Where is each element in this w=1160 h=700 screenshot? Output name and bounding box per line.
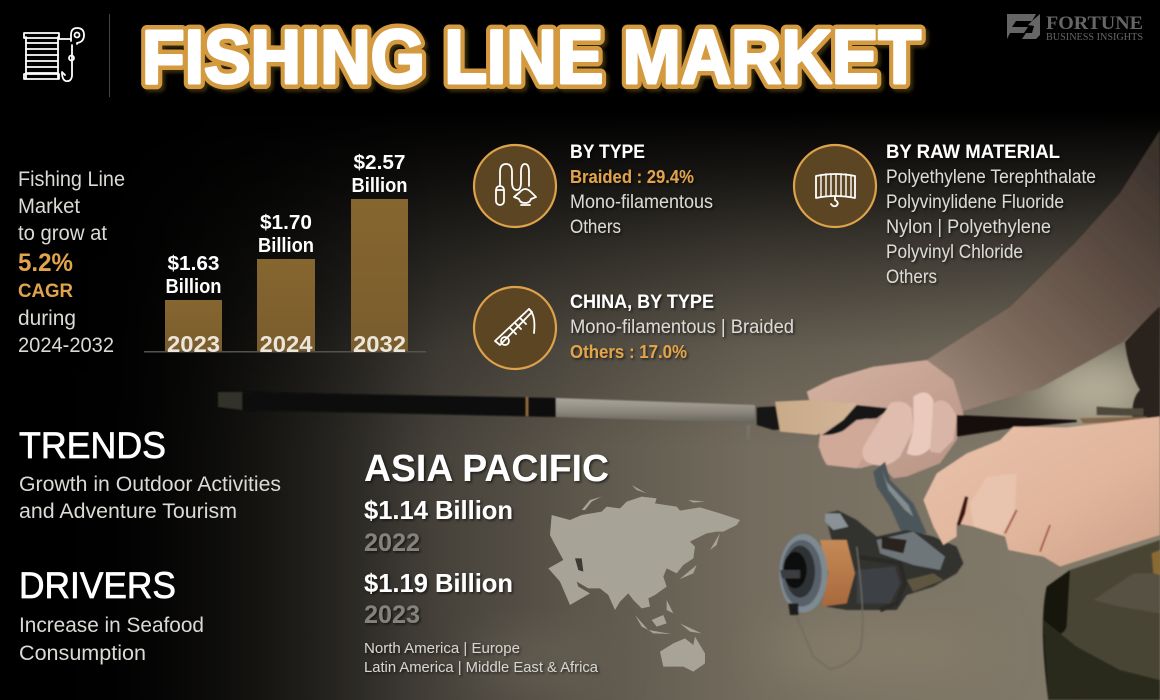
hook bbox=[59, 28, 84, 81]
text block: CAGR summary: Market bbox=[18, 195, 80, 218]
front hand bbox=[923, 417, 1160, 567]
text block: by raw material: Others bbox=[886, 266, 937, 288]
clothing at right edge bbox=[1125, 305, 1160, 425]
text block: Asia Pacific: 2022 bbox=[364, 529, 420, 557]
text block: Asia Pacific: 2023 bbox=[364, 601, 420, 629]
bar chart: 2023 bbox=[167, 331, 220, 357]
text block: China by type bbox=[570, 291, 794, 362]
brand logo: BUSINESS INSIGHTS bbox=[1046, 32, 1143, 43]
text block: by raw material bbox=[886, 141, 1096, 288]
text block: CAGR summary: to grow at bbox=[18, 222, 107, 245]
title: FISHING LINE MARKET bbox=[142, 15, 921, 100]
rod bbox=[218, 392, 242, 410]
text block: Asia Pacific: Latin America | Middle East & Africa bbox=[364, 659, 599, 676]
brand logo bbox=[1007, 13, 1143, 43]
text block: by raw material: BY RAW MATERIAL bbox=[886, 141, 1060, 163]
text block: Asia Pacific: North America | Europe bbox=[364, 640, 520, 657]
brand logo: FORTUNE bbox=[1046, 13, 1143, 34]
reel body bbox=[825, 511, 963, 610]
icon: spool and hook logo bbox=[24, 28, 84, 81]
text block: drivers: Consumption bbox=[19, 642, 146, 665]
bar chart: 2032 bbox=[353, 331, 406, 357]
text block: by raw material: Polyvinyl Chloride bbox=[886, 241, 1023, 263]
text block: drivers bbox=[19, 565, 204, 665]
text block: CAGR summary: CAGR bbox=[18, 281, 73, 302]
text block: by type: Braided : 29.4% bbox=[570, 167, 694, 187]
text block: CAGR summary: Fishing Line bbox=[18, 168, 125, 191]
reel spool bbox=[820, 540, 855, 607]
text block: Asia Pacific bbox=[364, 448, 609, 676]
text block: trends: and Adventure Tourism bbox=[19, 500, 237, 523]
icon: fishing rod bbox=[474, 287, 556, 369]
text block: China by type: CHINA, BY TYPE bbox=[570, 291, 714, 313]
text block: by type bbox=[570, 141, 713, 238]
title: FISHING LINE MARKET bbox=[142, 15, 921, 100]
bar chart: Billion bbox=[166, 275, 222, 298]
map: Asia Pacific bbox=[548, 485, 740, 672]
text block: trends: TRENDS bbox=[19, 425, 166, 466]
bar chart: Billion bbox=[352, 174, 408, 197]
text block: drivers: DRIVERS bbox=[19, 565, 176, 606]
bar chart bbox=[144, 151, 426, 357]
text block: by type: BY TYPE bbox=[570, 141, 645, 163]
back hand bbox=[807, 360, 963, 478]
bail wire bbox=[797, 547, 863, 669]
text block: by raw material: Polyvinylidene Fluoride bbox=[886, 191, 1064, 213]
fingers bbox=[819, 419, 877, 468]
text block: CAGR summary: during bbox=[18, 307, 76, 330]
upper arm bbox=[925, 130, 1160, 412]
text block: by type: Others bbox=[570, 216, 621, 238]
text block: Asia Pacific: ASIA PACIFIC bbox=[364, 448, 609, 490]
rod fitting and cork bbox=[747, 425, 751, 439]
text block: CAGR summary: 5.2% bbox=[18, 249, 73, 277]
text block: drivers: Increase in Seafood bbox=[19, 614, 204, 637]
trousers bbox=[1044, 540, 1160, 700]
text block: by raw material: Nylon | Polyethylene bbox=[886, 216, 1051, 238]
icon: line with lure and fish bbox=[474, 145, 556, 227]
text block: by raw material: Polyethylene Terephthalate bbox=[886, 166, 1096, 188]
bar chart: $2.57 bbox=[354, 151, 406, 174]
text block: CAGR summary bbox=[18, 168, 125, 357]
text block: CAGR summary: 2024-2032 bbox=[18, 334, 114, 357]
text block: Asia Pacific: $1.14 Billion bbox=[364, 495, 513, 525]
bar chart: $1.63 bbox=[168, 252, 220, 275]
text block: trends: Growth in Outdoor Activities bbox=[19, 473, 281, 496]
icon: raw material spool bbox=[794, 145, 876, 227]
bar chart: $1.70 bbox=[260, 211, 312, 234]
text block: by type: Mono-filamentous bbox=[570, 191, 713, 213]
text block: Asia Pacific: $1.19 Billion bbox=[364, 568, 513, 598]
header divider bbox=[109, 14, 110, 97]
text block: China by type: Mono-filamentous | Braided bbox=[570, 316, 794, 338]
text block: China by type: Others : 17.0% bbox=[570, 342, 687, 362]
reel handle arm bbox=[873, 462, 927, 537]
spool bbox=[24, 33, 59, 79]
text block: trends bbox=[19, 425, 281, 523]
bar chart: Billion bbox=[258, 234, 314, 257]
bar chart: 2024 bbox=[260, 331, 313, 357]
photo: fishing rod, hands and reel bbox=[218, 130, 1160, 700]
